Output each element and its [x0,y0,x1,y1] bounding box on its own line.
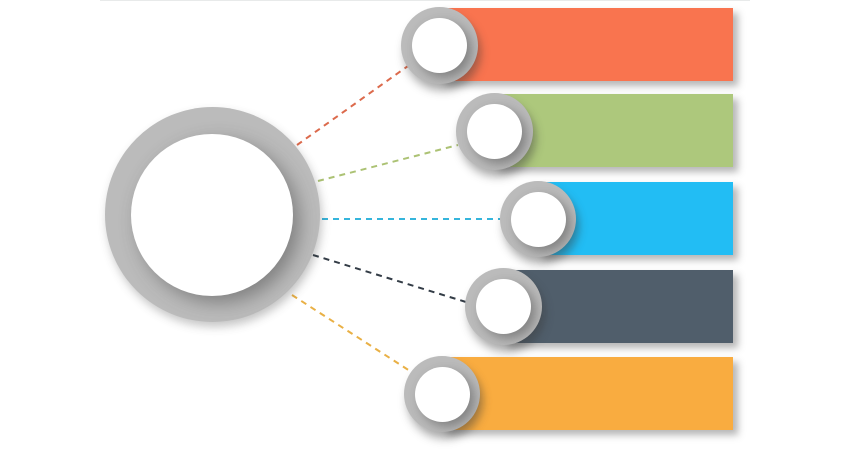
orange row circle [404,356,480,432]
row 2: green [454,93,742,182]
white centre [412,18,467,73]
slate row circle [465,268,542,345]
connector: dark [313,255,466,302]
green row circle [456,93,533,170]
white centre [476,279,531,334]
white centre [467,104,522,159]
red row circle [401,7,478,84]
green bar [494,94,732,167]
connector: blue [322,218,500,220]
central hub circle [105,107,320,322]
row 1: red [399,7,742,96]
white centre [415,367,470,422]
row 3: blue [498,181,742,269]
connector: orange [292,295,410,371]
blue row circle [500,181,576,257]
orange bar [442,357,732,430]
row 5: orange [402,356,742,444]
connector: green [318,145,458,181]
connector: red [297,66,408,145]
blue bar [538,182,732,255]
red bar [440,8,732,80]
top edge line [100,0,750,1]
row 4: slate [463,268,742,357]
slate bar [503,270,732,343]
white centre [511,192,566,247]
hub white centre [131,134,293,296]
